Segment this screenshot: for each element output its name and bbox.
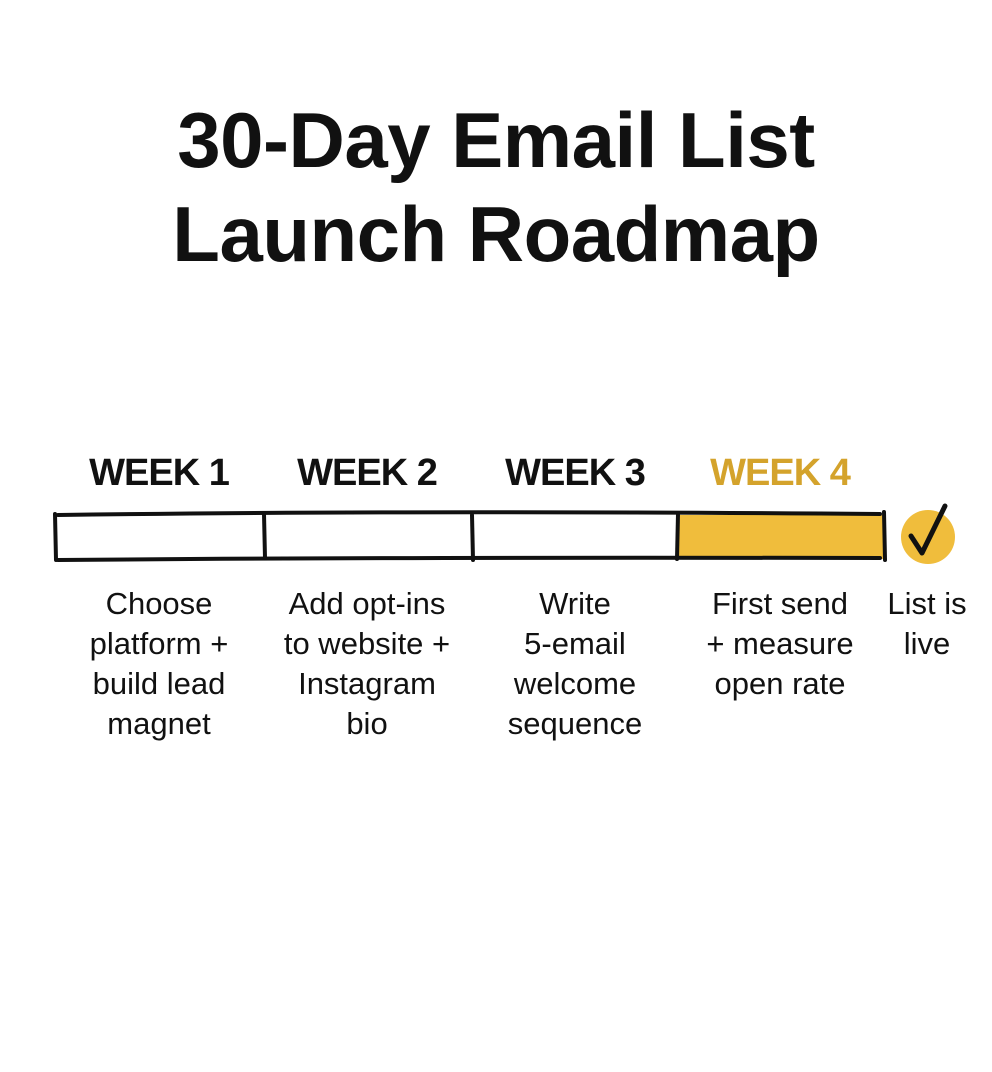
text: week 1: build lead bbox=[93, 666, 225, 701]
title: Launch Roadmap bbox=[172, 190, 820, 278]
text: live bbox=[887, 586, 967, 661]
text: week 4: + measure bbox=[706, 626, 854, 661]
text: week 4: open rate bbox=[714, 666, 846, 701]
text: live: live bbox=[904, 626, 950, 661]
text: week 3 bbox=[508, 586, 642, 741]
text: week 1 bbox=[90, 586, 228, 741]
text: week 2: Instagram bbox=[298, 666, 436, 701]
text: week 3: sequence bbox=[508, 706, 642, 741]
text: week 2 bbox=[284, 586, 450, 741]
text: week 3: 5-email bbox=[524, 626, 626, 661]
icon: check circle bbox=[901, 506, 955, 564]
text: week 1: magnet bbox=[107, 706, 211, 741]
title bbox=[172, 96, 820, 278]
label: week 1: WEEK 1 bbox=[89, 452, 229, 494]
label: week 3: WEEK 3 bbox=[505, 452, 645, 494]
text: week 2: Add opt-ins bbox=[289, 586, 445, 621]
text: week 2: bio bbox=[346, 706, 388, 741]
text: week 1: Choose bbox=[106, 586, 212, 621]
text: week 4: First send bbox=[712, 586, 848, 621]
text: week 2: to website + bbox=[284, 626, 450, 661]
text: week 4 bbox=[706, 586, 854, 701]
label: week 4: WEEK 4 bbox=[710, 452, 850, 494]
text: live: List is bbox=[887, 586, 967, 621]
text: week 1: platform + bbox=[90, 626, 228, 661]
label: week 2: WEEK 2 bbox=[297, 452, 437, 494]
title: 30-Day Email List bbox=[177, 96, 815, 184]
text: week 3: Write bbox=[539, 586, 611, 621]
text: week 3: welcome bbox=[514, 666, 636, 701]
